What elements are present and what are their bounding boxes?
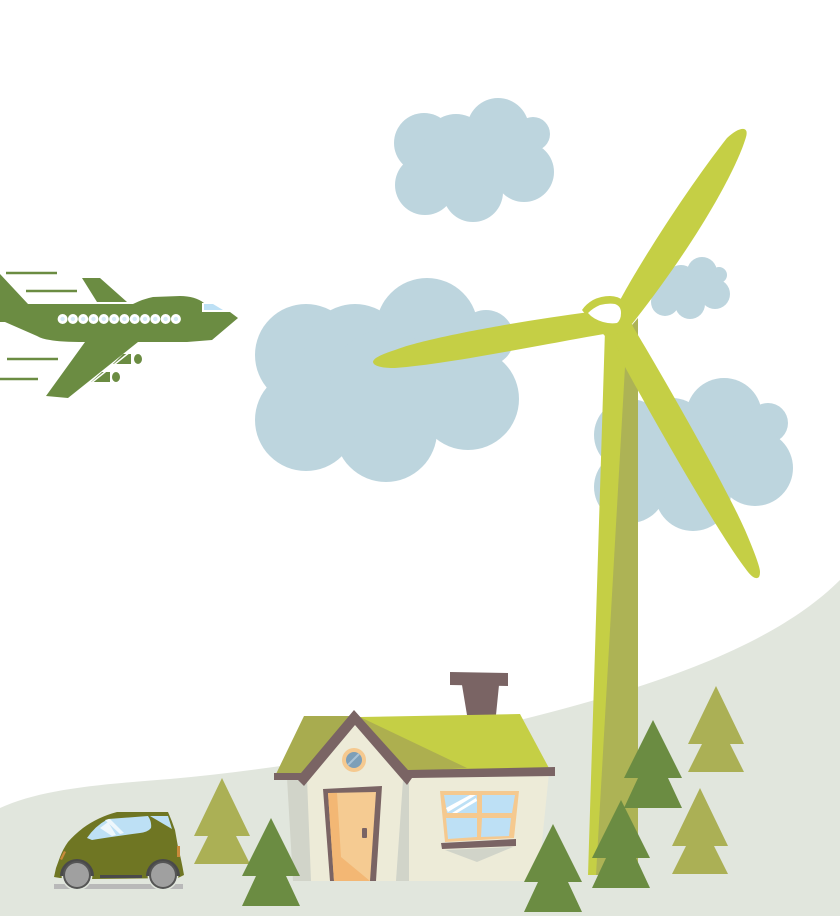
engines (70, 344, 144, 400)
tail fin (82, 278, 127, 302)
speed lines (0, 273, 77, 379)
tree: green right upper (624, 720, 682, 808)
chimney (450, 672, 508, 715)
tree: olive far right lower (672, 788, 728, 874)
tree: olive far right upper (688, 686, 744, 772)
wheel: front (60, 859, 94, 890)
blade: up (618, 129, 747, 324)
tree: green right lower (592, 800, 650, 888)
car (54, 812, 184, 890)
car windows (87, 816, 172, 840)
fuselage and wing (0, 274, 238, 398)
blade: left (373, 312, 610, 368)
round attic window (342, 748, 366, 772)
turbine hub (582, 296, 634, 336)
house (274, 672, 555, 881)
tree: green left (242, 818, 300, 906)
car shadow (54, 884, 183, 889)
cloud: large centre (255, 278, 519, 482)
ground hill (0, 580, 840, 916)
house window (440, 791, 519, 862)
cloud: small (651, 257, 730, 319)
car body (54, 812, 184, 879)
airplane (0, 273, 238, 400)
cloud: behind turbine (594, 378, 793, 531)
roof trim (274, 710, 555, 786)
turbine tower (588, 318, 638, 875)
roof (276, 714, 550, 774)
tree: olive left (194, 778, 250, 864)
car lights (60, 846, 180, 860)
cockpit window (202, 303, 230, 312)
walls (287, 722, 549, 881)
car sill (100, 875, 142, 878)
wheel: rear (146, 859, 180, 890)
wind turbine (373, 129, 760, 875)
cabin windows (58, 314, 181, 324)
blade: down (612, 325, 760, 578)
tree: green centre (524, 824, 582, 912)
door (323, 786, 382, 881)
cloud: top (394, 98, 554, 222)
